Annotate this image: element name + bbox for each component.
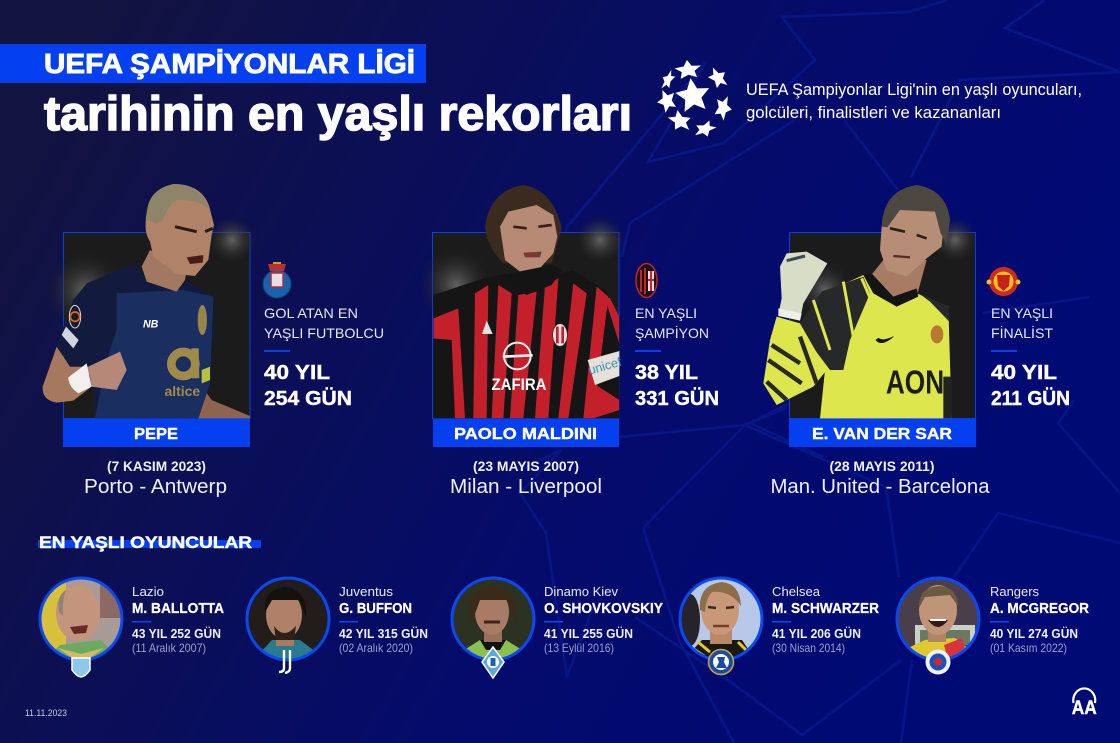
text: Ballotta: 43 YIL 252 GÜN xyxy=(132,626,221,641)
match info: Pepe: (7 KASIM 2023) xyxy=(107,459,206,474)
icon: Manchester United crest xyxy=(986,267,1020,296)
player: Buffon xyxy=(247,578,428,673)
icon: Rangers crest xyxy=(926,650,950,674)
title line 1: UEFA ŞAMPİYONLAR LİGİ xyxy=(44,48,415,79)
icon: Anadolu Agency logo xyxy=(1072,688,1097,719)
icon: Chelsea crest xyxy=(708,650,734,674)
player: Ballotta xyxy=(40,578,224,677)
match info: Pepe xyxy=(84,459,227,498)
match info: Van der Sar: Man. United - Barcelona xyxy=(770,476,990,498)
text: Schwarzer: M. SCHWARZER xyxy=(772,601,879,617)
photo: Pepe: altice xyxy=(164,383,200,399)
name bar: Pepe xyxy=(63,419,250,447)
photo: Maldini: ZAFIRA xyxy=(491,375,546,394)
text: Shovkovskiy: 41 YIL 255 GÜN xyxy=(544,626,633,641)
photo: Pepe: NB xyxy=(143,318,159,330)
record label: Pepe: GOL ATAN EN xyxy=(264,305,358,321)
text: Ballotta: (11 Aralık 2007) xyxy=(132,641,206,655)
record value: Maldini: 331 GÜN xyxy=(635,387,719,410)
icon: Dinamo Kiev crest xyxy=(482,647,504,678)
match info: Maldini: (23 MAYIS 2007) xyxy=(473,459,579,474)
text: Ballotta xyxy=(132,585,224,655)
text: Buffon: G. BUFFON xyxy=(339,601,412,617)
text: Schwarzer: (30 Nisan 2014) xyxy=(772,641,845,655)
match info: Pepe: Porto - Antwerp xyxy=(84,476,227,498)
panel: Pepe xyxy=(43,184,384,498)
title line 2: tarihinin en yaşlı rekorları xyxy=(44,88,632,141)
portrait: Buffon xyxy=(247,578,331,660)
icon: Anadolu Agency logo: AA xyxy=(1072,698,1097,719)
icon: Juventus crest xyxy=(279,650,290,673)
text: Buffon: Juventus xyxy=(339,585,393,599)
record label: Maldini: EN YAŞLI xyxy=(635,305,697,321)
record label: Van der Sar xyxy=(991,305,1053,341)
name bar: Van der Sar xyxy=(789,419,976,447)
record value: Van der Sar xyxy=(991,362,1070,410)
portrait: McGregor xyxy=(897,578,981,660)
record label: Pepe xyxy=(264,305,384,341)
match info: Van der Sar xyxy=(770,459,990,498)
text: Shovkovskiy: Dinamo Kiev xyxy=(544,585,619,599)
text: Shovkovskiy: (13 Eylül 2016) xyxy=(544,641,614,655)
record value: Pepe xyxy=(264,362,352,410)
icon: Porto crest xyxy=(263,262,291,298)
text: Schwarzer: Chelsea xyxy=(772,585,820,599)
section heading: EN YAŞLI OYUNCULAR xyxy=(39,533,252,552)
match info: Van der Sar: (28 MAYIS 2011) xyxy=(830,459,934,474)
record value: Van der Sar: 211 GÜN xyxy=(991,387,1070,410)
panel: Van der Sar xyxy=(763,185,1070,498)
record label: Van der Sar: EN YAŞLI xyxy=(991,305,1053,321)
text: McGregor: Rangers xyxy=(990,585,1039,599)
text: Shovkovskiy xyxy=(544,585,663,655)
icon: champions league starball xyxy=(656,59,734,140)
record label: Van der Sar: FİNALİST xyxy=(991,324,1053,341)
text: McGregor: (01 Kasım 2022) xyxy=(990,641,1067,655)
name bar: Maldini xyxy=(433,419,619,447)
photo: Maldini xyxy=(418,185,626,418)
text: McGregor: A. MCGREGOR xyxy=(990,601,1089,617)
text: Ballotta: Lazio xyxy=(132,585,164,599)
record value: Maldini: 38 YIL xyxy=(635,362,698,384)
record label: Maldini xyxy=(635,305,709,341)
record value: Maldini xyxy=(635,362,719,410)
photo: Maldini: unicef xyxy=(587,355,624,378)
name bar: Van der Sar: E. VAN DER SAR xyxy=(812,426,952,443)
record value: Van der Sar: 40 YIL xyxy=(991,362,1057,384)
record value: Pepe: 254 GÜN xyxy=(264,387,352,410)
record label: Pepe: YAŞLI FUTBOLCU xyxy=(264,325,384,341)
text: Schwarzer: 41 YIL 206 GÜN xyxy=(772,626,861,641)
text: Ballotta: M. BALLOTTA xyxy=(132,601,224,617)
text: Shovkovskiy: O. SHOVKOVSKIY xyxy=(544,601,663,617)
player: Shovkovskiy xyxy=(452,578,663,678)
text: Buffon: 42 YIL 315 GÜN xyxy=(339,626,428,641)
icon: Lazio crest xyxy=(58,648,104,677)
match info: Maldini xyxy=(450,459,602,498)
icon: Milan crest xyxy=(636,264,657,298)
record value: Pepe: 40 YIL xyxy=(264,362,330,384)
record label: Maldini: ŞAMPİYON xyxy=(635,324,709,341)
name bar: Maldini: PAOLO MALDINI xyxy=(454,426,597,443)
intro text xyxy=(746,81,1082,122)
photo: Van der Sar xyxy=(763,185,979,418)
player: McGregor xyxy=(897,578,1089,674)
intro text: UEFA Şampiyonlar Ligi'nin en yaşlı oyuncuları, xyxy=(746,81,1082,99)
portrait: Schwarzer xyxy=(680,578,764,660)
match info: Maldini: Milan - Liverpool xyxy=(450,476,602,498)
photo: Pepe xyxy=(43,184,257,418)
text: McGregor: 40 YIL 274 GÜN xyxy=(990,626,1078,641)
player: Schwarzer xyxy=(680,578,879,674)
portrait: Shovkovskiy xyxy=(452,578,536,660)
text: Buffon xyxy=(339,585,428,655)
intro text: golcüleri, finalistleri ve kazananları xyxy=(746,104,1001,122)
text: Buffon: (02 Aralık 2020) xyxy=(339,641,413,655)
panel: Maldini xyxy=(418,185,719,498)
text: Schwarzer xyxy=(772,585,879,655)
name bar: Pepe: PEPE xyxy=(134,426,178,443)
title banner xyxy=(0,44,426,83)
portrait: Ballotta xyxy=(40,578,124,660)
photo: Van der Sar: AON xyxy=(886,364,944,401)
text: McGregor xyxy=(990,585,1089,655)
date stamp: 11.11.2023 xyxy=(25,708,67,718)
